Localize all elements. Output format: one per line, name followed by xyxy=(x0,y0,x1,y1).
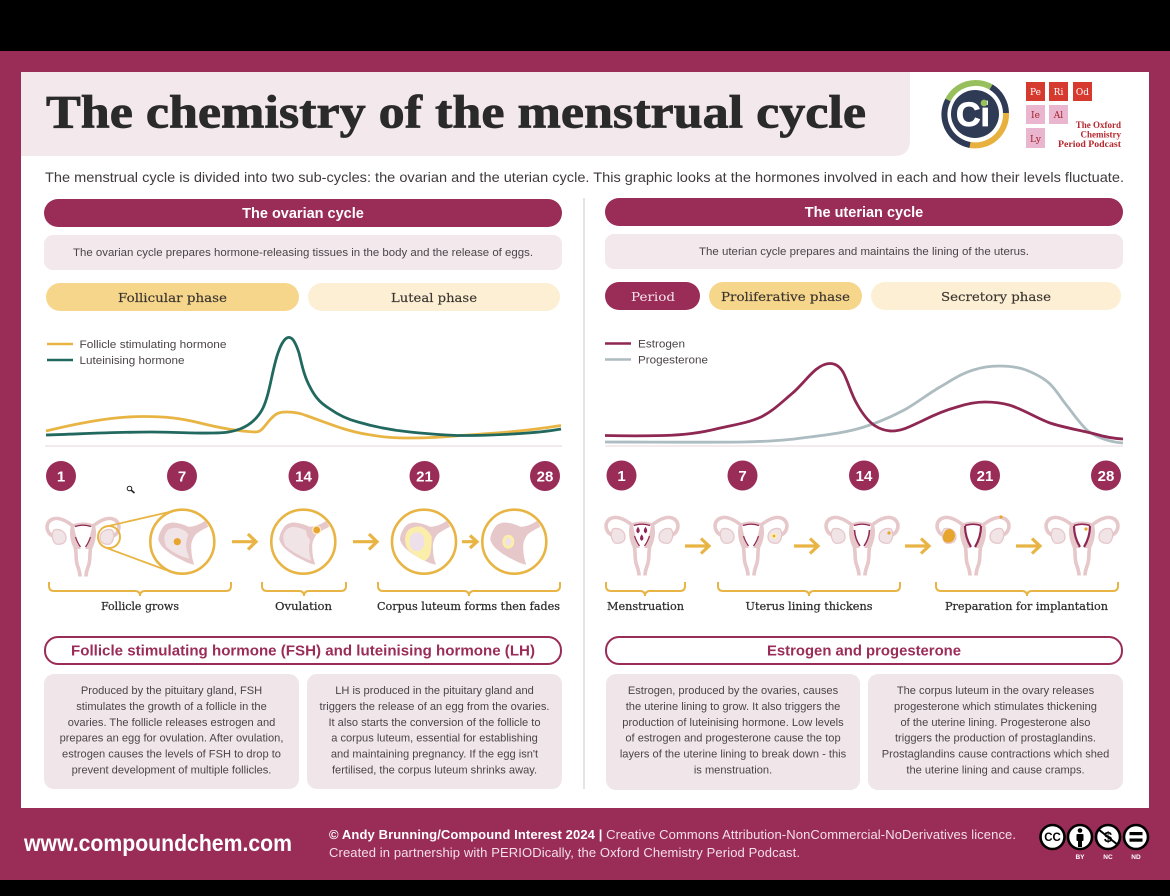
legend xyxy=(47,339,226,367)
text card: LH: LH is produced in the pituitary gland and xyxy=(335,685,534,697)
licence icons xyxy=(1040,825,1148,861)
ovarian summary xyxy=(44,235,562,270)
footer: credits: Created in partnership with PERIODically, the Oxford Chemistry Period Podcast. xyxy=(329,845,800,860)
heading: uterian cycle: The uterian cycle xyxy=(805,205,923,221)
logo: Oxford Chemistry Period Podcast: Al xyxy=(1053,111,1063,121)
text card: progesterone: of the uterine lining. Progesterone also xyxy=(901,717,1090,729)
logo: Oxford Chemistry Period Podcast: Ri xyxy=(1054,88,1063,98)
text card: LH: triggers the release of an egg from the ovaries. xyxy=(319,701,550,713)
arrow xyxy=(232,534,256,550)
brace: ovulation: Ovulation xyxy=(275,600,332,613)
day markers: uterian: 21 xyxy=(977,468,993,485)
day markers: uterian xyxy=(606,460,1121,490)
icon: NC: NC xyxy=(1103,854,1113,861)
text card: LH: It also starts the conversion of the follicle to xyxy=(328,717,541,729)
day markers: ovarian: 21 xyxy=(416,468,433,486)
brace: lining thickens: Uterus lining thickens xyxy=(746,600,873,613)
illustration: follicle grows xyxy=(47,510,214,576)
legend xyxy=(605,338,708,366)
day markers: ovarian: 28 xyxy=(537,468,553,486)
text card: progesterone: triggers the production of prostaglandins. xyxy=(895,732,1096,744)
illustration: menstruation xyxy=(606,517,678,576)
uterian summary xyxy=(605,234,1123,269)
logo: Oxford Chemistry Period Podcast: Od xyxy=(1076,88,1089,98)
bottom black band xyxy=(0,880,1170,896)
title banner xyxy=(21,72,910,156)
panel: ovarian cycle xyxy=(44,199,562,789)
brace: menstruation: Menstruation xyxy=(607,600,684,613)
illustration: corpus luteum fades xyxy=(482,510,546,574)
arrow xyxy=(905,538,929,554)
icon: ND: ND xyxy=(1131,854,1141,861)
phase bar: ovarian: Follicular phase xyxy=(118,290,227,305)
logo: Oxford Chemistry Period Podcast xyxy=(1026,82,1121,149)
text card: FSH xyxy=(44,674,299,789)
text card: FSH: prepares an egg for ovulation. After ovulation, xyxy=(60,732,283,744)
phase bar: uterian: Secretory phase xyxy=(941,289,1051,304)
phase bar: uterian: Period xyxy=(631,289,675,304)
text card: progesterone: Prostaglandins cause contractions which shed xyxy=(882,748,1109,760)
text card: estrogen: layers of the uterine lining to break down - this xyxy=(620,748,847,760)
icon: CC: CC xyxy=(1044,832,1061,844)
legend: Progesterone xyxy=(638,354,708,366)
arrow xyxy=(685,538,709,554)
phase bar: uterian xyxy=(605,282,1121,310)
text card: FSH: stimulates the growth of a follicle in the xyxy=(76,701,267,713)
logo: Oxford Chemistry Period Podcast: Period Podcast xyxy=(1058,139,1121,149)
heading: FSH and LH: Follicle stimulating hormone (FSH) and luteinising hormone (LH) xyxy=(71,644,535,660)
logo: Oxford Chemistry Period Podcast: Ly xyxy=(1030,135,1042,145)
centre divider xyxy=(583,198,585,789)
footer: credits: © Andy Brunning/Compound Interest 2024 | Creative Commons Attribution-NonCommercial-NoDerivatives licence. xyxy=(329,827,1016,842)
brace: follicle grows xyxy=(49,582,231,613)
panel: uterian cycle xyxy=(605,198,1123,790)
brace: ovulation xyxy=(262,582,346,613)
text card: LH: and maintaining pregnancy. If the egg isn't xyxy=(331,748,538,760)
logo: Oxford Chemistry Period Podcast: The Oxford xyxy=(1076,120,1121,130)
text card: estrogen xyxy=(606,674,860,790)
illustration: ovulation xyxy=(271,510,335,574)
text card: LH: a corpus luteum, essential for establishing xyxy=(331,732,538,744)
brace: corpus luteum: Corpus luteum forms then fades xyxy=(377,600,560,613)
phase bar: ovarian: Luteal phase xyxy=(391,290,477,305)
illustration: lining stage 1 xyxy=(715,517,787,576)
brace: implantation: Preparation for implantation xyxy=(945,600,1108,613)
text card: FSH: prevent development of multiple follicles. xyxy=(72,764,271,776)
brace: corpus luteum xyxy=(377,582,560,613)
text card: progesterone xyxy=(868,674,1123,790)
day markers: ovarian xyxy=(46,461,560,491)
illustration: corpus luteum xyxy=(392,510,456,574)
day markers: ovarian: 7 xyxy=(178,468,186,486)
brace: menstruation xyxy=(606,582,685,613)
text card: FSH: Produced by the pituitary gland, FSH xyxy=(81,685,262,697)
logo: Oxford Chemistry Period Podcast: Chemistry xyxy=(1080,130,1121,140)
white content panel xyxy=(21,72,1149,808)
text card: estrogen: of estrogen and progesterone cause the top xyxy=(625,732,841,744)
text card: estrogen: Estrogen, produced by the ovaries, causes xyxy=(628,685,839,697)
illustration: lining stage 2 xyxy=(826,517,898,576)
icon: magnifier cursor xyxy=(127,486,134,493)
logo: Compound Interest: Ci xyxy=(956,96,990,134)
text card: estrogen: the uterine lining to grow. It also triggers the xyxy=(626,701,840,713)
title: The chemistry of the menstrual cycle xyxy=(46,88,866,138)
day markers: ovarian: 14 xyxy=(295,468,312,486)
top black band xyxy=(0,0,1170,51)
text card: LH xyxy=(307,674,562,789)
uterian summary: The uterian cycle prepares and maintains the lining of the uterus. xyxy=(699,246,1029,258)
chart: estrogen and progesterone xyxy=(605,338,1123,446)
logo: Oxford Chemistry Period Podcast: Pe xyxy=(1030,88,1041,98)
footer: website: www.compoundchem.com xyxy=(23,830,292,856)
icon: NC xyxy=(1096,825,1120,861)
heading: uterian cycle xyxy=(605,198,1123,226)
heading: FSH and LH xyxy=(45,637,561,664)
text card: FSH: ovaries. The follicle releases estrogen and xyxy=(68,717,275,729)
text card: estrogen: production of luteinising hormone. Low levels xyxy=(622,717,844,729)
icon: BY: BY xyxy=(1075,854,1085,861)
text card: progesterone: The corpus luteum in the ovary releases xyxy=(897,685,1095,697)
text card: LH: fertilised, the corpus luteum shrinks away. xyxy=(332,764,537,776)
text card: estrogen: is menstruation. xyxy=(694,764,772,776)
icon: NC: $ xyxy=(1104,829,1113,846)
phase bar: ovarian xyxy=(46,283,560,311)
ovarian summary: The ovarian cycle prepares hormone-releasing tissues in the body and the release of eggs. xyxy=(73,247,533,259)
legend: Luteinising hormone xyxy=(80,355,184,367)
footer: credits xyxy=(329,827,1016,860)
intro text: The menstrual cycle is divided into two sub-cycles: the ovarian and the uterian cycle. This graphic looks at the hormones involved in each and how their levels fluctuate. xyxy=(45,169,1124,185)
heading: ovarian cycle: The ovarian cycle xyxy=(242,206,364,222)
illustration: lining stage 4 xyxy=(1046,517,1118,576)
day markers: uterian: 28 xyxy=(1098,468,1114,485)
arrow xyxy=(353,534,377,550)
text card: FSH: estrogen causes the levels of FSH to drop to xyxy=(62,748,281,760)
day markers: ovarian: 1 xyxy=(57,468,65,486)
legend: Estrogen xyxy=(638,338,685,350)
day markers: uterian: 14 xyxy=(856,468,873,485)
text card: progesterone: the uterine lining and cause cramps. xyxy=(906,764,1085,776)
arrow xyxy=(462,536,477,548)
phase bar: uterian: Proliferative phase xyxy=(721,289,850,304)
day markers: uterian: 7 xyxy=(738,468,747,485)
logo: Oxford Chemistry Period Podcast: Ie xyxy=(1031,111,1040,121)
brace: follicle grows: Follicle grows xyxy=(101,600,179,613)
arrow xyxy=(1016,538,1040,554)
arrow xyxy=(794,538,818,554)
legend: Follicle stimulating hormone xyxy=(80,339,226,351)
brace: lining thickens xyxy=(718,582,900,613)
heading: estrogen and progesterone: Estrogen and progesterone xyxy=(767,644,961,660)
brace: implantation xyxy=(936,582,1118,613)
heading: estrogen and progesterone xyxy=(606,637,1122,664)
illustration: lining stage 3 xyxy=(937,515,1009,576)
heading: ovarian cycle xyxy=(44,199,562,227)
logo: Compound Interest xyxy=(944,83,1006,145)
chart: FSH and LH xyxy=(45,337,562,446)
day markers: uterian: 1 xyxy=(617,468,626,485)
text card: progesterone: progesterone which stimulates thickening xyxy=(894,701,1097,713)
